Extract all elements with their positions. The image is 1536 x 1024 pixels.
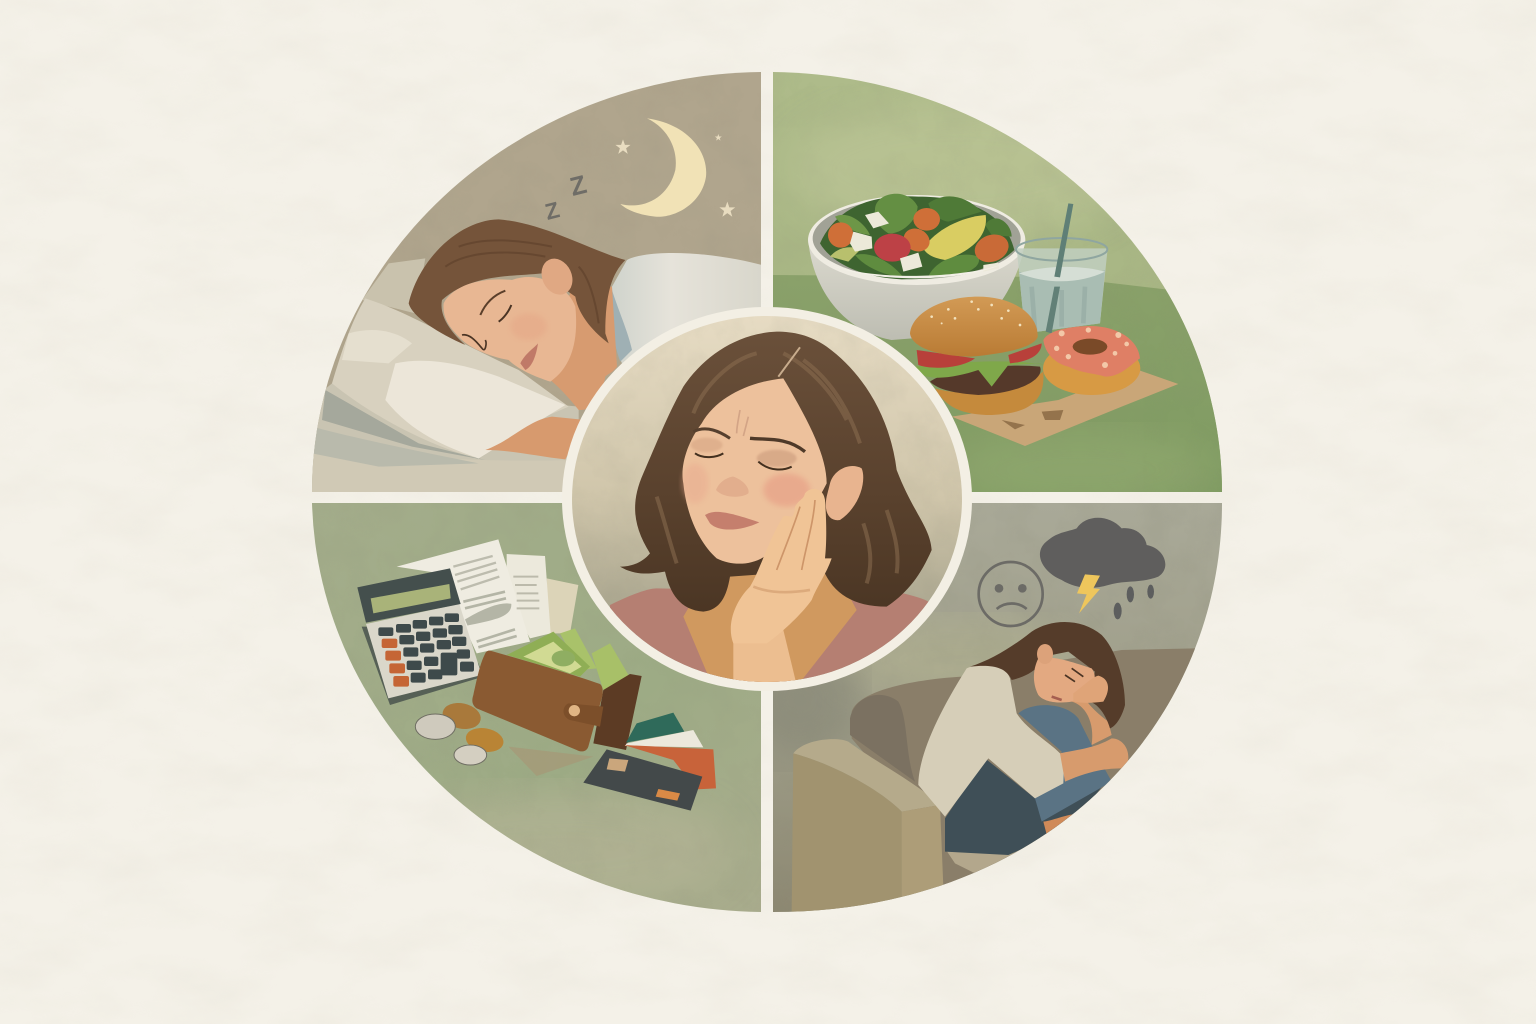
salad bbox=[820, 194, 1014, 279]
neck and chest bbox=[683, 560, 857, 687]
hair parting bbox=[778, 347, 800, 377]
icon: sad face bbox=[979, 562, 1043, 626]
icon: crescent moon bbox=[620, 118, 706, 217]
face bbox=[1034, 644, 1095, 703]
receipt under wallet bbox=[508, 747, 593, 776]
face bbox=[682, 378, 827, 564]
table bbox=[773, 275, 1222, 492]
glass with straw bbox=[1016, 203, 1108, 333]
burger bbox=[910, 297, 1055, 415]
pillow bbox=[332, 298, 569, 458]
sesame seeds bbox=[930, 300, 1021, 326]
hair bbox=[970, 622, 1125, 728]
shin bbox=[1043, 814, 1072, 834]
keys bbox=[378, 613, 474, 683]
panel: sleep bbox=[312, 72, 762, 493]
hair bbox=[409, 219, 625, 345]
face bbox=[443, 254, 578, 382]
sleep letters: Z bbox=[567, 169, 590, 202]
pink top bbox=[610, 588, 963, 710]
ear bbox=[826, 466, 863, 520]
jeans bbox=[945, 705, 1112, 855]
icon: raindrops bbox=[1114, 585, 1154, 619]
coins bbox=[415, 700, 505, 765]
sleep letters: Z bbox=[542, 196, 562, 225]
nightshirt bbox=[611, 253, 762, 363]
wallet bbox=[472, 651, 642, 751]
panel: low mood bbox=[740, 503, 1222, 912]
hair bbox=[620, 332, 932, 612]
donut bbox=[1043, 326, 1140, 395]
neck and shoulder bbox=[545, 287, 617, 410]
sofa arm bbox=[792, 739, 943, 912]
hand bbox=[731, 489, 832, 685]
icon: storm cloud bbox=[1040, 518, 1165, 588]
salad bowl bbox=[808, 194, 1025, 340]
cardigan bbox=[918, 665, 1064, 817]
arm bbox=[485, 417, 585, 459]
icon: stars bbox=[615, 134, 735, 217]
paper napkin bbox=[952, 370, 1178, 446]
forearm bbox=[1060, 738, 1128, 782]
credit cards bbox=[583, 713, 716, 811]
hair strands bbox=[445, 240, 599, 323]
hand on forehead bbox=[1073, 676, 1108, 703]
icon: lightning bolt bbox=[1077, 574, 1100, 613]
banknotes bbox=[507, 628, 633, 690]
centre portrait bbox=[562, 307, 972, 710]
hair shine bbox=[657, 353, 898, 583]
panel: food bbox=[773, 72, 1222, 510]
panel: finances bbox=[312, 503, 761, 912]
bed bbox=[312, 258, 579, 493]
sofa bbox=[850, 648, 1195, 886]
sleep letters bbox=[545, 175, 588, 220]
upper arm resting bbox=[1072, 692, 1112, 745]
papers bbox=[397, 539, 578, 653]
calculator bbox=[357, 568, 483, 705]
